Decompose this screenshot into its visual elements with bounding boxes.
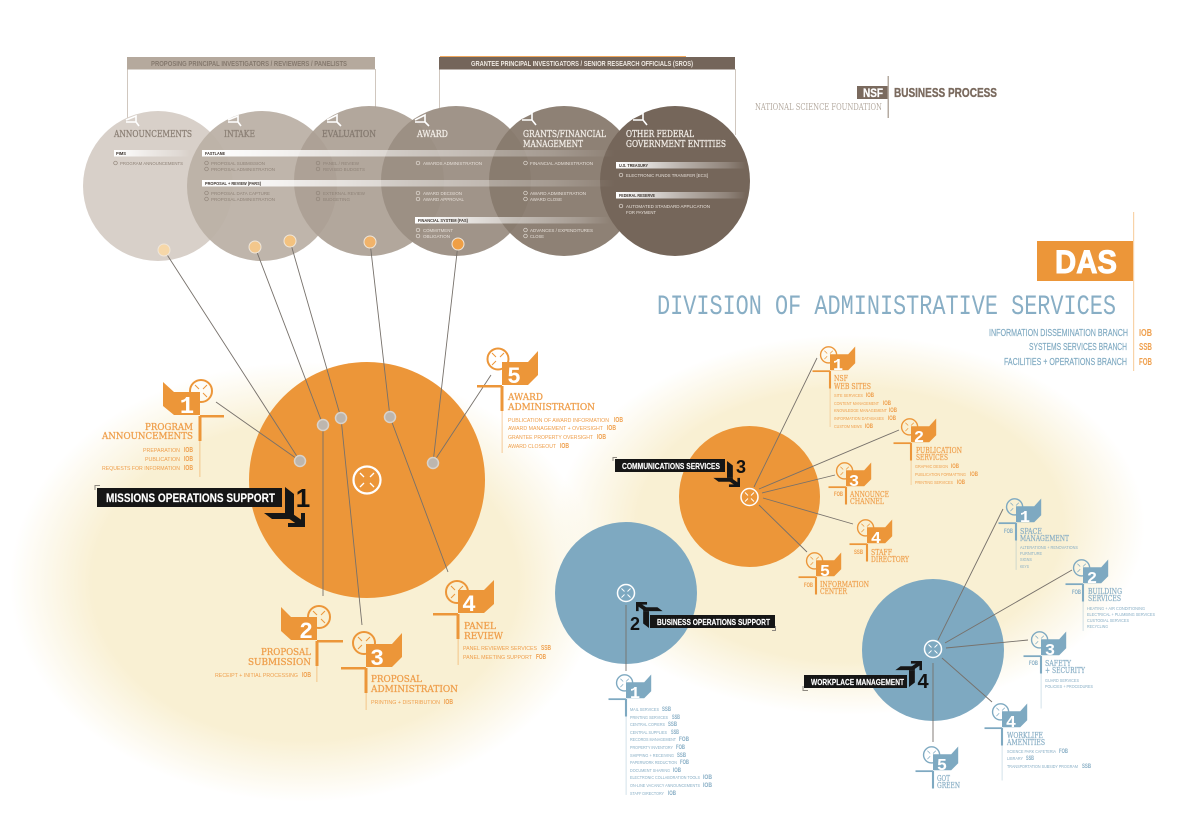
comm flag 1: NSF web sites: 1 [833,357,843,376]
flag 2: proposal submission: RECEIPT + INITIAL PROCESSING [215,673,298,679]
comm flag 3: announce channel: 3 [849,473,859,492]
label: workplace management: WORKPLACE MANAGEMENT [811,677,905,687]
business flag 1 with service list: FOB [679,737,690,743]
flag 1: program announcements: 1 [180,394,194,421]
comm flag 4: staff directory: STAFF [871,547,892,557]
process list items: PROPOSAL DATA CAPTURE [211,191,270,196]
business flag 1 with service list [608,674,713,797]
label: business operations support: 2 [630,614,640,634]
process circle dots [158,235,464,256]
label: missions operations support: MISSIONS OPERATIONS SUPPORT [106,491,276,505]
comm flag 2: publication services: 2 [914,429,924,448]
workplace flag 4: worklife amenities: FOB [1059,749,1068,755]
DAS title block [657,212,1152,371]
comm flag 3: announce channel: ANNOUNCE [849,489,889,499]
business flag 1 with service list: CENTRAL COPIERS [630,722,665,727]
flag 3: proposal administration: ADMINISTRATION [370,684,458,695]
process list items: AUTOMATED STANDARD APPLICATION [626,204,710,209]
process list items: AWARD CLOSE [530,197,562,202]
circle: business operations support [555,522,697,664]
process list items: PANEL / REVIEW [323,161,360,166]
workplace flag 4: worklife amenities: WORKLIFE [1007,730,1043,740]
flag 2: proposal submission: SUBMISSION [248,657,311,668]
circle: workplace management [862,579,1004,721]
business flag 1 with service list: FOB [680,760,689,766]
comm flag 2: publication services: PUBLICATION [916,445,962,455]
business flag 1 with service list: IOB [703,783,713,789]
flag 5: award administration: PUBLICATION OF AWARD INFORMATION [508,418,609,424]
workplace flag 4: worklife amenities: AMENITIES [1006,737,1045,747]
circle headings: GRANTS/FINANCIAL [523,129,607,140]
DAS title block: IOB [1139,328,1152,339]
NSF business process logo [755,76,997,118]
NSF business process logo: NATIONAL SCIENCE FOUNDATION [755,103,882,113]
workplace flag 2: building services: BUILDING [1088,586,1122,596]
comm flag 1: NSF web sites: NSF [834,373,848,383]
flag 1: program announcements: PUBLICATION [145,457,180,463]
flag 5: award administration: ADMINISTRATION [507,402,595,413]
background: cream glow right [555,335,1145,715]
process list items: AWARD APPROVAL [423,197,464,202]
flag 1: program announcements [101,380,224,477]
workplace flag 1: space management: FURNITURE [1020,551,1042,556]
workplace flag 3: safety and security: GUARD SERVICES [1045,678,1079,683]
business flag 1 with service list: SSB [677,753,686,759]
header band: proposing principal investigators: PROPOSING PRINCIPAL INVESTIGATORS / REVIEWERS / PANELISTS [151,61,347,68]
circle: communications services [679,426,820,567]
label: missions operations support: 1 [296,483,310,513]
flag 1: program announcements: REQUESTS FOR INFORMATION [102,466,180,472]
comm flag 4: staff directory: DIRECTORY [871,554,909,564]
workplace flag 1: space management: KEYS [1020,564,1029,569]
workplace flag 5: got green: GOT [937,773,950,783]
flag 1: program announcements: IOB [184,447,193,454]
flag 5: award administration: 5 [507,364,521,390]
business flag 1 with service list: FOB [676,745,685,751]
hub icon: communications [741,488,758,506]
flag 1: program announcements: PREPARATION [143,448,180,454]
process list items: ADVANCES / EXPENDITURES [530,228,593,233]
process list items: AWARD ADMINISTRATION [530,191,586,196]
business flag 1 with service list: RECORDS MANAGEMENT [630,737,676,742]
comm flag 4: staff directory [850,520,909,564]
business flag 1 with service list: ELECTRONIC COLLABORATION TOOLS [630,775,700,780]
comm flag 2: publication services: SERVICES [916,452,948,462]
system bars [114,150,746,224]
workplace flag 1: space management: SPACE [1020,526,1042,536]
comm flag 3: announce channel: CHANNEL [850,496,884,506]
business flag 1 with service list: IOB [703,775,713,781]
business flag 1 with service list: SHIPPING + RECEIVING [630,753,674,758]
comm flag 1: NSF web sites: KNOWLEDGE MANAGEMENT [834,408,887,413]
hub icon: workplace [924,640,942,658]
flag 1: program announcements: PROGRAM [145,422,193,433]
circle: award [381,106,531,256]
flag 3: proposal administration: PRINTING + DISTRIBUTION [371,700,440,706]
comm flag 5: information center: CENTER [820,586,848,596]
mission circle dots [294,412,438,468]
flag 4: panel review [433,580,551,665]
flag 4: panel review: REVIEW [464,631,503,642]
comm flag 1: NSF web sites: IOB [866,393,874,399]
workplace flag 3: safety and security: 3 [1045,642,1055,661]
process list items: FOR PAYMENT [626,210,656,215]
workplace flag 4: worklife amenities: SSB [1026,756,1034,762]
flag 5: award administration: GRANTEE PROPERTY OVERSIGHT [508,435,594,441]
workplace flag 3: safety and security: + SECURITY [1045,665,1085,675]
circle: intake [187,111,337,261]
circle headings: GOVERNMENT ENTITIES [626,139,726,150]
flag 5: award administration: IOB [607,425,616,432]
flag 2: proposal submission [215,606,343,682]
flag 3: proposal administration: PROPOSAL [371,674,423,685]
process list items: REVISED BUDGETS [323,167,365,172]
process list items: ELECTRONIC FUNDS TRANSFER [ECS] [626,173,708,178]
workplace flag 3: safety and security: SAFETY [1045,658,1071,668]
flag 5: award administration: AWARD [507,392,543,403]
DAS title block: FOB [1139,357,1152,368]
NSF business process logo: NSF [863,86,883,100]
workplace flag 3: safety and security [1024,632,1093,708]
label: workplace management: 4 [917,671,929,693]
comm flag 1: NSF web sites: IOB [883,401,891,407]
comm flag 2: publication services: PUBLICATION FORMATTING [915,472,966,477]
hub icon: business [618,584,634,602]
hub icon: missions [354,466,380,494]
comm flag 5: information center [798,552,869,596]
workplace flag 2: building services: HEATING + AIR CONDITIONING [1087,606,1145,611]
workplace flag 2: building services: 2 [1087,570,1097,589]
circle headings: AWARD [416,129,448,140]
business flag 1 with service list: PRINTING SERVICES [630,715,668,720]
comm flag 1: NSF web sites: IOB [889,408,897,414]
comm flag 2: publication services: IOB [951,464,959,470]
circle: evaluation [294,106,444,256]
connector lines [164,241,1072,742]
workplace flag 2: building services: CUSTODIAL SERVICES [1087,618,1129,623]
system bars: PROPOSAL + REVIEW (PARS) [205,181,261,186]
workplace flag 2: building services: RECYCLING [1087,624,1108,629]
business flag 1 with service list: SSB [671,730,679,736]
process circles row [83,106,750,261]
business flag 1 with service list: STAFF DIRECTORY [630,791,664,796]
label: business operations support: BUSINESS OPERATIONS SUPPORT [657,617,771,627]
circle headings: MANAGEMENT [523,139,584,150]
process list items: CLOSE [530,234,544,239]
workplace flag 5: got green: 5 [937,757,947,776]
process list items: COMMITMENT [423,228,453,233]
process list items: PROPOSAL ADMINISTRATION [211,167,275,172]
label: workplace management [803,661,929,693]
system bars: FEDERAL RESERVE [619,193,655,198]
background: cream glow left [10,362,600,802]
circle headings [113,129,726,150]
comm flag 3: announce channel: FOB [834,492,843,498]
business flag 1 with service list: 1 [630,685,640,704]
comm flag 2: publication services: IOB [970,472,978,478]
business flag 1 with service list: DOCUMENT SHARING [630,768,670,773]
business flag 1 with service list: PAPERWORK REDUCTION [630,760,677,765]
DAS title block: SSB [1139,342,1152,353]
process list items: PROPOSAL ADMINISTRATION [211,197,275,202]
label: communications services: COMMUNICATIONS SERVICES [622,461,720,471]
comm flag 1: NSF web sites: IOB [888,416,896,422]
flag 4: panel review: 4 [462,592,476,618]
workplace flag 1: space management: MANAGEMENT [1020,533,1069,543]
flag 5: award administration: IOB [560,443,569,450]
comm flag 1: NSF web sites: IOB [865,424,873,430]
flag 5: award administration: IOB [614,417,623,424]
flag 4: panel review: PANEL MEETING SUPPORT [463,655,533,661]
process list bullets [114,161,623,238]
comm flag 4: staff directory: 4 [871,530,881,549]
flag 4: panel review: SSB [541,645,551,652]
flag 4: panel review: PANEL REVIEWER SERVICES [463,646,538,652]
comm flag 1: NSF web sites: SITE SERVICES [834,393,863,398]
business flag 1 with service list: IOB [673,768,681,774]
comm flag 2: publication services [894,418,978,486]
process list items: OBLIGATION [423,234,450,239]
workplace flag 3: safety and security: POLICIES + PROCEDURES [1045,684,1093,689]
process list items: BUDGETING [323,197,350,202]
process list items: EXTERNAL REVIEW [323,191,366,196]
business flag 1 with service list: CENTRAL SUPPLIES [630,730,667,735]
business flag 1 with service list: SSB [662,707,671,713]
header band: grantee principal investigators: GRANTEE PRINCIPAL INVESTIGATORS / SENIOR RESEARCH OFFICIALS (SROS) [471,61,693,68]
business flag 1 with service list: PROPERTY INVENTORY [630,745,673,750]
flag 5: award administration: IOB [597,434,606,441]
flag 1: program announcements: IOB [184,465,193,472]
process list items: AWARDS ADMINISTRATION [423,161,482,166]
header band: grantee principal investigators [439,56,736,135]
workplace flag 2: building services: FOB [1072,590,1081,596]
process list items: AWARD DECISION [423,191,462,196]
header band: proposing principal investigators [127,57,376,118]
system bars: FINANCIAL SYSTEM (FAS) [418,218,468,223]
flag 4: panel review: FOB [536,654,546,661]
circle entry arrows [126,113,647,126]
circle: grants and financial management [489,106,639,256]
flag 1: program announcements: ANNOUNCEMENTS [101,431,193,442]
DAS title block: INFORMATION DISSEMINATION BRANCH [989,328,1128,339]
circle: announcements [83,111,233,261]
system bars: U.S. TREASURY [619,163,648,168]
flag 3: proposal administration [341,632,458,710]
comm flag 2: publication services: IOB [957,480,965,486]
workplace flag 5: got green: GREEN [937,780,960,790]
system bars: PIMS [116,151,126,156]
comm flag 5: information center: INFORMATION [820,579,869,589]
workplace flag 4: worklife amenities [984,704,1091,780]
DAS title block: DAS [1055,244,1117,280]
comm flag 1: NSF web sites: CONTENT MANAGEMENT [834,401,879,406]
circle: missions operations support [249,362,485,598]
DAS title block: SYSTEMS SERVICES BRANCH [1029,342,1127,353]
business flag 1 with service list: SSB [668,722,677,728]
workplace flag 2: building services [1066,560,1155,631]
NSF business process logo: BUSINESS PROCESS [894,86,997,100]
comm flag 1: NSF web sites: CUSTOM NEWS [834,424,862,429]
flag 2: proposal submission: PROPOSAL [261,647,312,658]
workplace flag 5: got green [916,746,960,790]
flag 3: proposal administration: IOB [444,699,453,706]
workplace flag 1: space management: SIGNS [1020,557,1032,562]
circle headings: EVALUATION [322,129,376,140]
workplace flag 1: space management [998,498,1078,570]
comm flag 3: announce channel [828,462,889,506]
comm flag 1: NSF web sites [812,346,897,430]
workplace flag 4: worklife amenities: SSB [1082,764,1091,770]
process list items: PROGRAM ANNOUNCEMENTS [120,161,183,166]
comm flag 2: publication services: GRAPHIC DESIGN [915,464,948,469]
business flag 1 with service list: SSB [672,715,680,721]
flag 2: proposal submission: 2 [299,619,313,645]
flag 5: award administration: AWARD MANAGEMENT + OVERSIGHT [508,426,604,432]
workplace flag 2: building services: ELECTRICAL + PLUMBING SERVICES [1087,612,1155,617]
circle headings: OTHER FEDERAL [626,129,695,140]
process list items [120,161,710,239]
comm flag 5: information center: FOB [804,583,813,589]
workplace flag 4: worklife amenities: LIBRARY [1007,756,1023,761]
workplace flag 1: space management: FOB [1004,529,1013,535]
label: missions operations support [95,483,310,527]
business flag 1 with service list: MAIL SERVICES [630,707,659,712]
flag 5: award administration [477,348,623,453]
circle headings: ANNOUNCEMENTS [113,129,192,140]
flag 2: proposal submission: IOB [302,672,311,679]
workplace flag 1: space management: ALTERATIONS + RENOVATIONS [1020,545,1078,550]
workplace flag 3: safety and security: FOB [1029,661,1038,667]
label: communications services: 3 [736,457,746,477]
system bars: FASTLANE [205,151,225,156]
workplace flag 4: worklife amenities: TRANSPORTATION SUBSIDY PROGRAM [1007,764,1078,769]
workplace flag 1: space management: 1 [1020,509,1030,528]
circle: other federal government entities [600,106,750,256]
flag 3: proposal administration: 3 [370,646,384,672]
label: business operations support [630,602,776,634]
flag 5: award administration: AWARD CLOSEOUT [508,444,557,450]
DAS title block: FACILITIES + OPERATIONS BRANCH [1004,357,1127,368]
comm flag 1: NSF web sites: INFORMATION DATABASES [834,416,884,421]
label: communications services [613,457,746,487]
workplace flag 2: building services: SERVICES [1088,593,1121,603]
circle headings: INTAKE [224,129,255,140]
comm flag 5: information center: 5 [820,563,830,582]
business flag 1 with service list: IOB [668,791,676,797]
process list items: FINANCIAL ADMINISTRATION [530,161,593,166]
process list items: PROPOSAL SUBMISSION [211,161,265,166]
flag 1: program announcements: IOB [184,456,193,463]
workplace flag 4: worklife amenities: 4 [1006,714,1016,733]
comm flag 4: staff directory: SSB [854,550,863,556]
comm flag 2: publication services: PRINTING SERVICES [915,480,953,485]
business flag 1 with service list: ON-LINE VACANCY ANNOUNCEMENTS [630,783,700,788]
comm flag 1: NSF web sites: WEB SITES [834,381,871,391]
flag 4: panel review: PANEL [464,621,497,632]
workplace flag 4: worklife amenities: SCIENCE PARK CAFETERIA [1007,749,1056,754]
